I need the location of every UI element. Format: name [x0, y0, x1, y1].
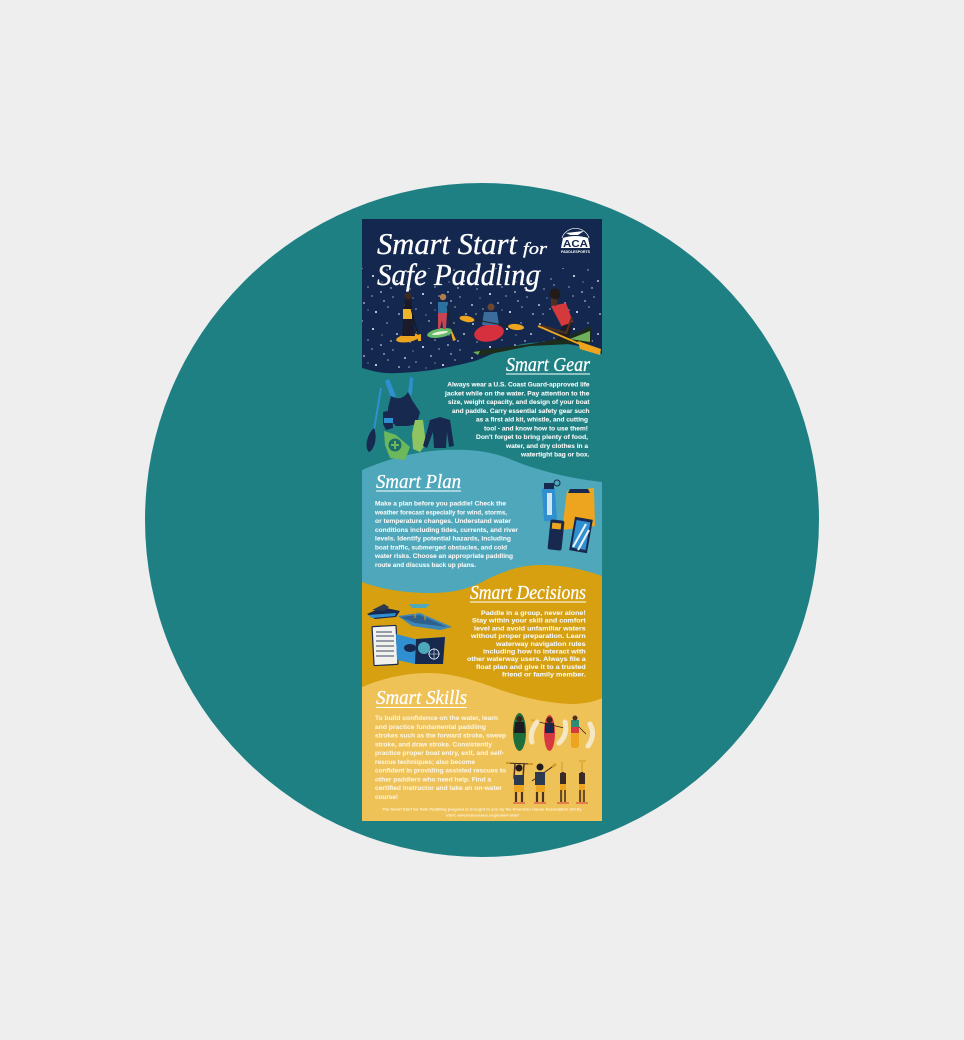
text: smart decisions body — [467, 610, 586, 679]
figure: paddler on orange board — [395, 292, 421, 344]
text: smart decisions body: other waterway users. Always file a — [467, 656, 586, 663]
text: smart gear body: watertight bag or box. — [520, 452, 590, 459]
text: smart skills body: other paddlers who need help. Find a — [375, 776, 491, 783]
figure: paddler holding paddle overhead — [506, 763, 533, 803]
icon: radio — [547, 519, 565, 551]
text: smart skills body: course! — [375, 794, 398, 801]
heading: smart decisions: Smart Decisions — [470, 582, 586, 604]
text: smart decisions body: friend or family member. — [502, 672, 586, 679]
panel: smart decisions background — [362, 565, 602, 710]
icon: stroke direction arcs — [531, 722, 593, 746]
text: smart plan body: or temperature changes. Understand water — [375, 518, 511, 525]
text: smart decisions body: including how to interact with — [483, 648, 586, 656]
text: smart decisions body: float plan and give it to a trusted — [476, 664, 586, 671]
icon: paddle — [367, 388, 381, 452]
icon: float plan clipboard — [372, 625, 398, 666]
footer note — [382, 806, 582, 818]
figure: paddler holding angled paddle — [532, 764, 556, 803]
text: smart gear body — [444, 382, 590, 459]
text: smart gear body: and paddle. Carry essential safety gear such — [452, 408, 590, 415]
infographic panel — [362, 219, 602, 821]
figure: kayaker in red kayak — [459, 304, 524, 344]
icon: wetsuit — [423, 417, 454, 448]
panel: header night sky — [362, 219, 602, 379]
figure: side view paddler with raised paddle — [576, 761, 588, 803]
text: smart skills body: rescue techniques; also become — [375, 759, 475, 766]
title: Safe Paddling — [377, 257, 540, 292]
figure: side view paddler — [557, 762, 569, 803]
footer note: Visit: americancanoe.org/smart-start — [446, 812, 520, 818]
text: smart skills body: strokes such as the forward stroke, sweep — [375, 733, 506, 740]
icon: first aid dry bag — [384, 431, 410, 460]
text: smart plan body: route and discuss back up plans. — [375, 562, 476, 569]
icon: water bottle — [542, 480, 560, 521]
text: smart gear body: as a first aid kit, whistle, and cutting — [476, 417, 588, 424]
text: smart plan body: Make a plan before you paddle! Check the — [375, 501, 506, 508]
text: smart skills body: and practice fundamental paddling — [375, 724, 486, 731]
text: smart plan body — [374, 501, 518, 569]
logo: ACA paddlesports: ACA — [563, 238, 588, 250]
text: smart plan body: water risks. Choose an appropriate paddling — [374, 553, 513, 560]
icon: green kayak forward stroke — [513, 713, 526, 751]
text: smart skills body: stroke, and draw stroke. Consistently — [375, 741, 492, 748]
text: smart skills body — [375, 715, 506, 801]
icon: red kayak sweep stroke — [531, 715, 564, 751]
title: Smart Start — [377, 226, 518, 261]
heading: smart plan: Smart Plan — [376, 471, 461, 493]
panel: smart skills background — [362, 673, 602, 821]
text: smart gear body: jacket while on the water. Pay attention to the — [444, 390, 590, 397]
background teal circle — [145, 183, 819, 857]
text: smart skills body: practice proper boat entry, exit, and self- — [375, 750, 504, 757]
heading: smart skills: Smart Skills — [376, 687, 467, 709]
text: smart decisions body: Paddle in a group, never alone! — [481, 610, 586, 617]
text: smart plan body: boat traffic, submerged obstacles, and cold — [375, 544, 507, 551]
icon: orange dry bag — [562, 488, 595, 530]
text: smart decisions body: level and avoid unfamiliar waters — [474, 625, 586, 632]
text: smart skills body: certified instructor and take an on-water — [375, 785, 502, 792]
icon: jet ski — [367, 604, 400, 619]
footer note: The Smart Start for Safe Paddling program is brought to you by the American Canoe Association (ACA). — [382, 806, 582, 812]
icon: motor boat — [398, 604, 452, 630]
text: smart plan body: weather forecast especially for wind, storms, — [374, 509, 507, 516]
text: smart gear body: Don't forget to bring plenty of food, — [476, 434, 588, 441]
icon: green dry bag — [412, 420, 426, 452]
title: for — [523, 239, 547, 258]
text: smart decisions body: waterway navigation rules — [495, 641, 586, 648]
text: smart decisions body: without proper preparation. Learn — [470, 633, 586, 640]
text: smart gear body: Always wear a U.S. Coast Guard-approved life — [447, 382, 590, 389]
title — [377, 226, 547, 292]
icon: navigation map — [396, 634, 445, 664]
logo: ACA paddlesports: PADDLESPORTS — [561, 250, 591, 254]
text: smart skills body: To build confidence on the water, learn — [375, 715, 498, 722]
text: smart plan body: levels. Identify potential hazards, including — [375, 536, 511, 543]
panel: smart gear background — [362, 342, 602, 379]
text: smart skills body: confident in providing assisted rescues to — [375, 768, 506, 775]
figure: paddler on green board — [426, 294, 456, 341]
icon: life jacket — [383, 377, 420, 430]
heading: smart gear: Smart Gear — [506, 354, 590, 376]
icon: phone case — [569, 517, 593, 553]
text: smart gear body: water, and dry clothes in a — [505, 443, 588, 450]
panel: smart plan background — [362, 450, 602, 600]
figure: canoeist with yellow paddle — [473, 288, 601, 356]
icon: orange board draw stroke — [571, 716, 586, 748]
text: smart plan body: conditions including tides, currents, and river — [375, 527, 518, 534]
text: smart decisions body: Stay within your skill and comfort — [472, 618, 586, 625]
text: smart gear body: size, weight capacity, and design of your boat — [448, 399, 590, 406]
text: smart gear body: tool - and know how to use them! — [484, 425, 588, 432]
logo: ACA paddlesports — [561, 228, 591, 254]
